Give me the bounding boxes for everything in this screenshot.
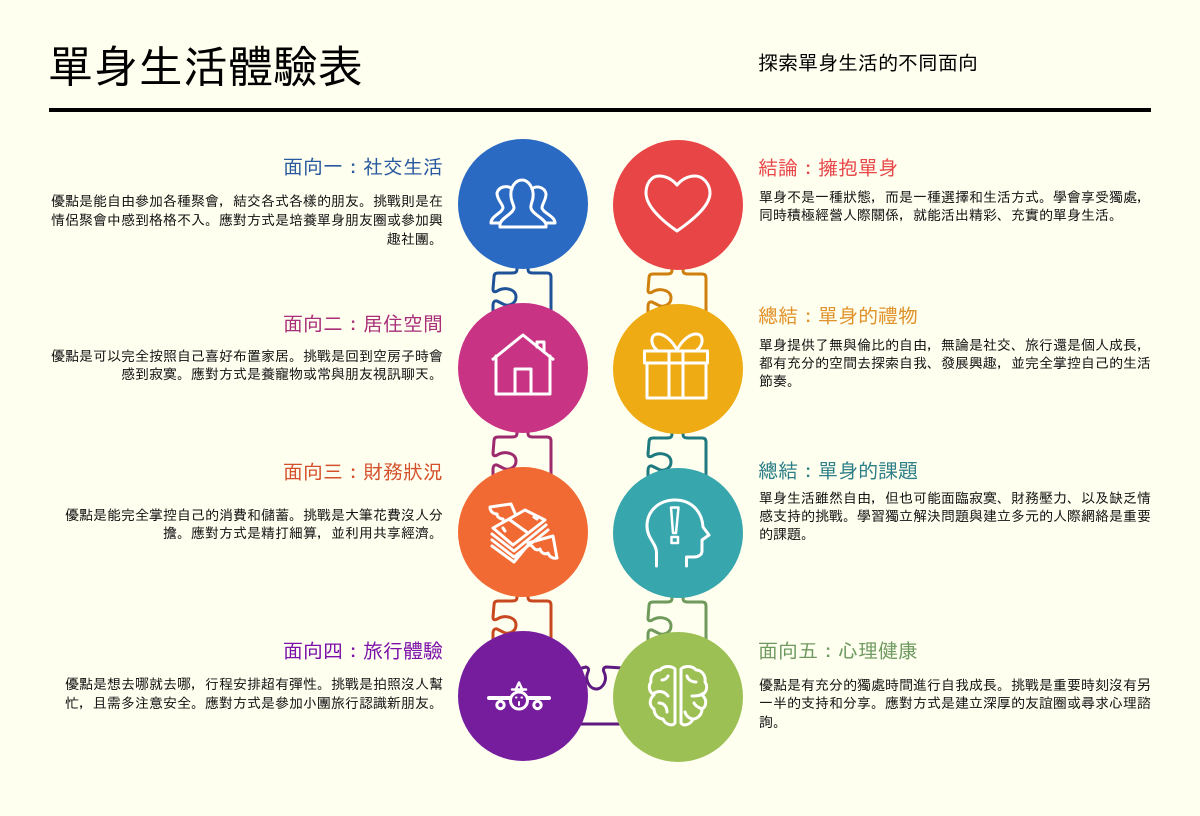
heading: 面向一：社交生活 <box>283 157 443 179</box>
text: 忙，且需多注意安全。應對方式是參加小團旅行認識新朋友。 <box>65 695 443 711</box>
icon: house <box>492 335 554 394</box>
panel: travel <box>65 631 588 761</box>
connector: social to home <box>493 269 551 312</box>
icon: brain <box>649 666 707 725</box>
text: 感支持的挑戰。學習獨立解決問題與建立多元的人際網絡是重要 <box>759 508 1151 524</box>
text: 優點是可以完全按照自己喜好布置家居。挑戰是回到空房子時會 <box>51 348 443 364</box>
heading: 總結：單身的禮物 <box>758 305 918 328</box>
text: 擔。應對方式是精打細算，並利用共享經濟。 <box>163 525 443 541</box>
circle: living <box>458 303 588 433</box>
heading: 面向四：旅行體驗 <box>283 641 443 663</box>
icon: flying money <box>490 504 557 562</box>
panel: finances <box>65 462 588 597</box>
circle: mental health <box>613 632 743 762</box>
text: 都有充分的空間去探索自我、發展興趣，並完全掌控自己的生活 <box>759 355 1151 371</box>
text: 詢。 <box>759 714 787 730</box>
heading: 結論：擁抱單身 <box>758 158 898 180</box>
text: 節奏。 <box>759 373 801 389</box>
panel: mental health <box>613 632 1151 762</box>
circle: finances <box>458 467 588 597</box>
text: 單身生活雖然自由，但也可能面臨寂寞、財務壓力、以及缺乏情 <box>759 490 1151 506</box>
text: 趣社團。 <box>387 231 443 247</box>
icon: heart <box>646 176 710 231</box>
circle: conclusion <box>613 140 743 270</box>
text: 同時積極經營人際關係，就能活出精彩、充實的單身生活。 <box>759 207 1123 223</box>
panel: gift <box>613 304 1151 434</box>
connector: head to brain <box>648 598 706 641</box>
text: 優點是想去哪就去哪，行程安排超有彈性。挑戰是拍照沒人幫 <box>65 676 443 692</box>
text: 情侶聚會中感到格格不入。應對方式是培養單身朋友圈或參加興 <box>51 212 443 228</box>
text: 感到寂寞。應對方式是養寵物或常與朋友視訊聊天。 <box>121 366 443 382</box>
panel: living space <box>51 303 588 433</box>
heading: 總結：單身的課題 <box>758 461 918 483</box>
circle: gift <box>613 304 743 434</box>
connector: money to plane <box>493 597 551 640</box>
panel: social life <box>51 139 588 269</box>
icon: head with exclamation <box>647 500 709 566</box>
circle: social <box>458 139 588 269</box>
panel: conclusion <box>613 140 1151 270</box>
text: 優點是有充分的獨處時間進行自我成長。挑戰是重要時刻沒有另 <box>759 677 1151 693</box>
text: 優點是能完全掌控自己的消費和儲蓄。挑戰是大筆花費沒人分 <box>65 507 443 523</box>
icon: people <box>491 180 555 227</box>
text: 單身不是一種狀態，而是一種選擇和生活方式。學會享受獨處， <box>759 189 1151 205</box>
text: 一半的支持和分享。應對方式是建立深厚的友誼圈或尋求心理諮 <box>759 695 1151 711</box>
circle: challenges <box>613 468 743 598</box>
subtitle: 探索單身生活的不同面向 <box>758 53 978 75</box>
heading: 面向二：居住空間 <box>283 314 443 336</box>
connector: home to money <box>493 433 551 476</box>
text: 優點是能自由參加各種聚會，結交各式各樣的朋友。挑戰則是在 <box>51 193 443 209</box>
text: 單身提供了無與倫比的自由，無論是社交、旅行還是個人成長， <box>759 337 1151 353</box>
connector: gift to head <box>648 434 706 477</box>
title: 單身生活體驗表 <box>48 42 363 93</box>
text: 的課題。 <box>759 526 815 542</box>
connector: plane to brain <box>580 667 622 724</box>
panel: challenges <box>613 461 1151 598</box>
circle: travel <box>458 631 588 761</box>
icon: gift <box>644 334 708 398</box>
heading: 面向五：心理健康 <box>758 641 918 663</box>
connector: heart to gift <box>648 270 706 313</box>
icon: airplane <box>489 682 549 709</box>
heading: 面向三：財務狀況 <box>283 462 443 484</box>
